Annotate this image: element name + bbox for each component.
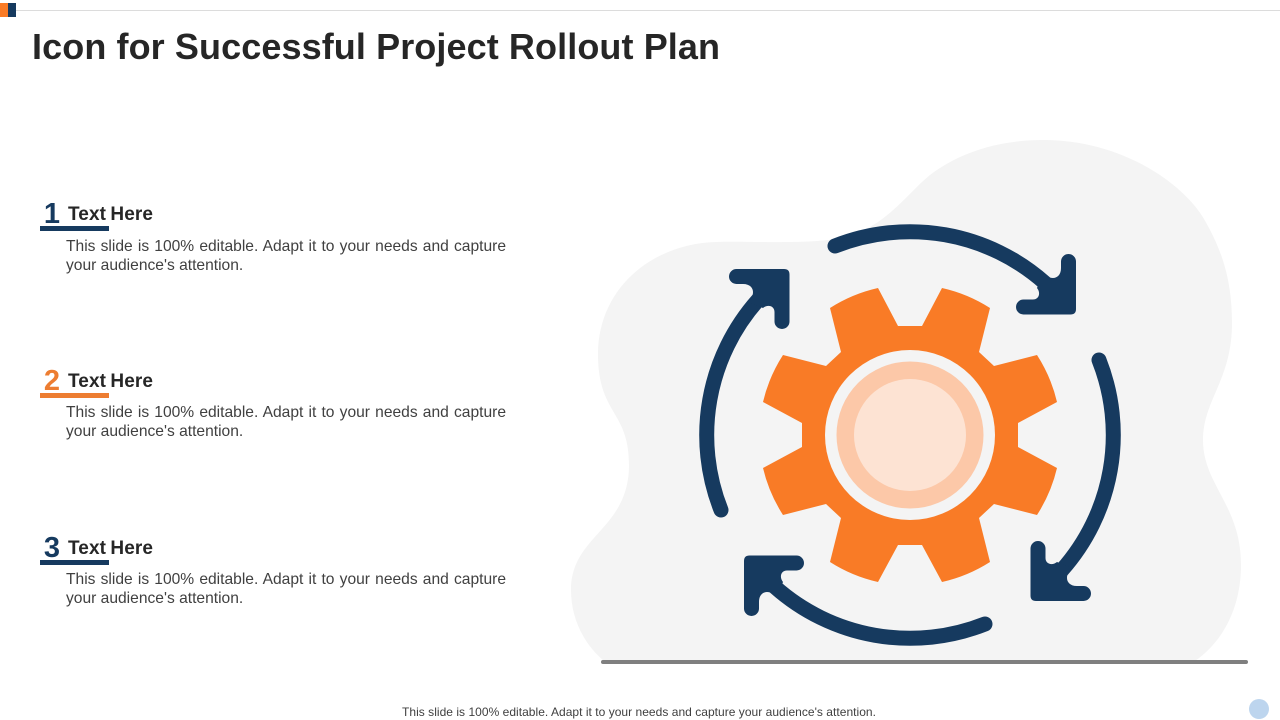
number 1: 1 <box>44 198 60 230</box>
body text 2: This slide is 100% editable. Adapt it to your needs and capture your audience's attention. <box>66 404 506 440</box>
title: Icon for Successful Project Rollout Plan <box>32 26 720 67</box>
gear hub outer <box>836 362 984 508</box>
number 2: 2 <box>44 365 60 397</box>
gear hub inner <box>854 379 966 491</box>
arrow: right <box>1030 360 1113 601</box>
arrow: top <box>835 232 1076 314</box>
corner dot <box>1249 699 1269 719</box>
heading 1: Text Here <box>68 204 153 225</box>
ground line <box>601 660 1248 664</box>
body text 3: This slide is 100% editable. Adapt it to your needs and capture your audience's attention. <box>66 570 506 607</box>
heading 3: Text Here <box>68 538 153 559</box>
header accent squares <box>0 3 16 17</box>
background blob <box>571 140 1241 661</box>
gear teeth <box>763 288 1057 582</box>
arrow: bottom <box>744 556 985 638</box>
list item 1 <box>40 198 506 274</box>
heading 2: Text Here <box>68 371 153 392</box>
arrow: left <box>707 269 790 510</box>
gear hub ring <box>825 350 995 520</box>
number 3: 3 <box>44 532 60 564</box>
footer note: This slide is 100% editable. Adapt it to your needs and capture your audience's attention. <box>402 705 876 719</box>
list item 3 <box>40 532 506 607</box>
list item 2 <box>40 365 506 440</box>
gear <box>763 288 1057 582</box>
body text 1: This slide is 100% editable. Adapt it to your needs and capture your audience's attention. <box>66 238 506 274</box>
